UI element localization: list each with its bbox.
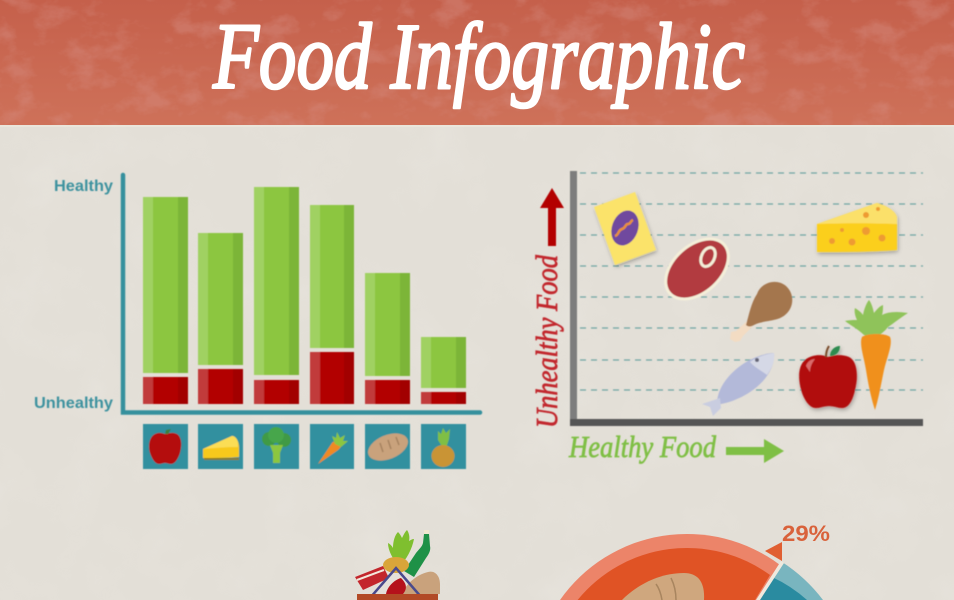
- arrow: unhealthy up: [540, 188, 564, 246]
- pie outer ring: orange: [560, 534, 780, 600]
- red box: [355, 566, 389, 590]
- label: 29%: 29%: [782, 521, 830, 546]
- food: steak: [652, 225, 742, 313]
- icon: carrot tile: [310, 424, 354, 469]
- bar: carrot: [310, 205, 354, 404]
- food: cheese wedge: [817, 203, 897, 252]
- bar: cheese: [198, 233, 243, 404]
- pineapple: [383, 557, 409, 573]
- basket body: [357, 594, 438, 600]
- bar: pineapple: [421, 337, 466, 404]
- icon: bread tile: [364, 424, 412, 469]
- icon: pineapple tile: [421, 424, 466, 469]
- chart axes: [123, 175, 480, 412]
- horizontal axis: [570, 419, 923, 426]
- leaves: [388, 530, 414, 567]
- bottle: [404, 534, 430, 577]
- food: cereal box: [594, 192, 656, 265]
- slice separator: [756, 561, 784, 600]
- axis label: Unhealthy: Unhealthy: [34, 395, 113, 412]
- food: fish: [702, 353, 774, 416]
- bar: bread: [365, 273, 410, 404]
- food: apple: [799, 346, 857, 408]
- bar: apple: [143, 197, 188, 404]
- food: chicken leg: [730, 282, 792, 342]
- icon: cheese tile: [198, 424, 243, 469]
- box stripe: [357, 570, 384, 580]
- handle: [370, 568, 422, 598]
- bread: [402, 572, 440, 594]
- dashed guide lines: [580, 173, 923, 390]
- apple: [386, 578, 406, 594]
- scatter chart: healthy vs unhealthy food: [529, 171, 923, 464]
- axis title: Healthy Food: Healthy Food: [568, 429, 716, 464]
- pie chart with bread icon: [560, 521, 830, 600]
- axis title: Unhealthy Food: Unhealthy Food: [529, 255, 564, 428]
- pointer triangle: [765, 542, 782, 561]
- bar chart: healthy vs unhealthy: [34, 175, 480, 469]
- vertical axis: [570, 171, 577, 424]
- icon: broccoli tile: [254, 424, 299, 469]
- food: carrot: [845, 300, 908, 410]
- icon: apple tile: [143, 424, 188, 469]
- bread in pie: [622, 573, 704, 600]
- pie dark teal slice: [758, 577, 807, 600]
- title: Food Infographic: [212, 5, 745, 109]
- bar: broccoli: [254, 187, 299, 404]
- bottle cap: [424, 530, 429, 534]
- banner with title: [0, 0, 954, 127]
- pie inner: orange: [578, 548, 770, 600]
- axis label: Healthy: Healthy: [54, 178, 113, 195]
- icon: shopping basket: [355, 530, 440, 600]
- pie teal slice: [758, 562, 823, 600]
- arrow: healthy right: [726, 439, 784, 463]
